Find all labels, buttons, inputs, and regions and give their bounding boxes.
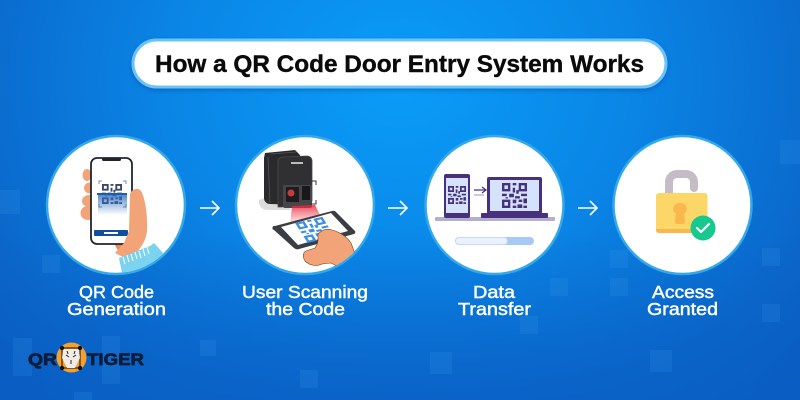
label 4: Access bbox=[652, 282, 714, 302]
label 2: the Code bbox=[266, 299, 345, 319]
arrow 3 bbox=[578, 201, 597, 215]
icon: check badge bbox=[690, 216, 716, 240]
circle 1 bbox=[47, 136, 185, 274]
label 3: Transfer bbox=[458, 299, 531, 319]
circle 3 bbox=[426, 136, 564, 274]
arrow 1 bbox=[200, 201, 219, 215]
logo: QR Tiger: QR bbox=[28, 350, 57, 369]
logo: QR Tiger: TIGER bbox=[87, 350, 144, 369]
icon: tiger face bbox=[60, 346, 82, 370]
step 2: user scanning the code bbox=[236, 136, 374, 319]
title pill bbox=[133, 40, 666, 87]
step 4: access granted bbox=[614, 136, 752, 319]
logo: QR Tiger bbox=[28, 342, 144, 372]
label 1 bbox=[67, 282, 166, 319]
label 2: User Scanning bbox=[242, 282, 368, 302]
icon: scanner and phone bbox=[259, 150, 357, 269]
label 1: QR Code bbox=[79, 282, 154, 302]
icon: phone and laptop bbox=[435, 174, 555, 245]
step 3: data transfer bbox=[426, 136, 564, 319]
label 3 bbox=[458, 282, 531, 319]
circle 2 bbox=[236, 136, 374, 274]
label 1: Generation bbox=[67, 299, 166, 319]
icon: open padlock bbox=[656, 174, 716, 240]
label 4: Granted bbox=[647, 299, 718, 319]
title: How a QR Code Door Entry System Works bbox=[155, 51, 644, 78]
label 2 bbox=[242, 282, 368, 319]
step 1: QR code generation bbox=[47, 136, 185, 319]
label 3: Data bbox=[473, 282, 515, 302]
icon: hand holding phone bbox=[80, 158, 164, 273]
arrow 2 bbox=[388, 201, 407, 215]
progress bar bbox=[455, 237, 534, 245]
circle 4 bbox=[614, 136, 752, 274]
label 4 bbox=[647, 282, 718, 319]
